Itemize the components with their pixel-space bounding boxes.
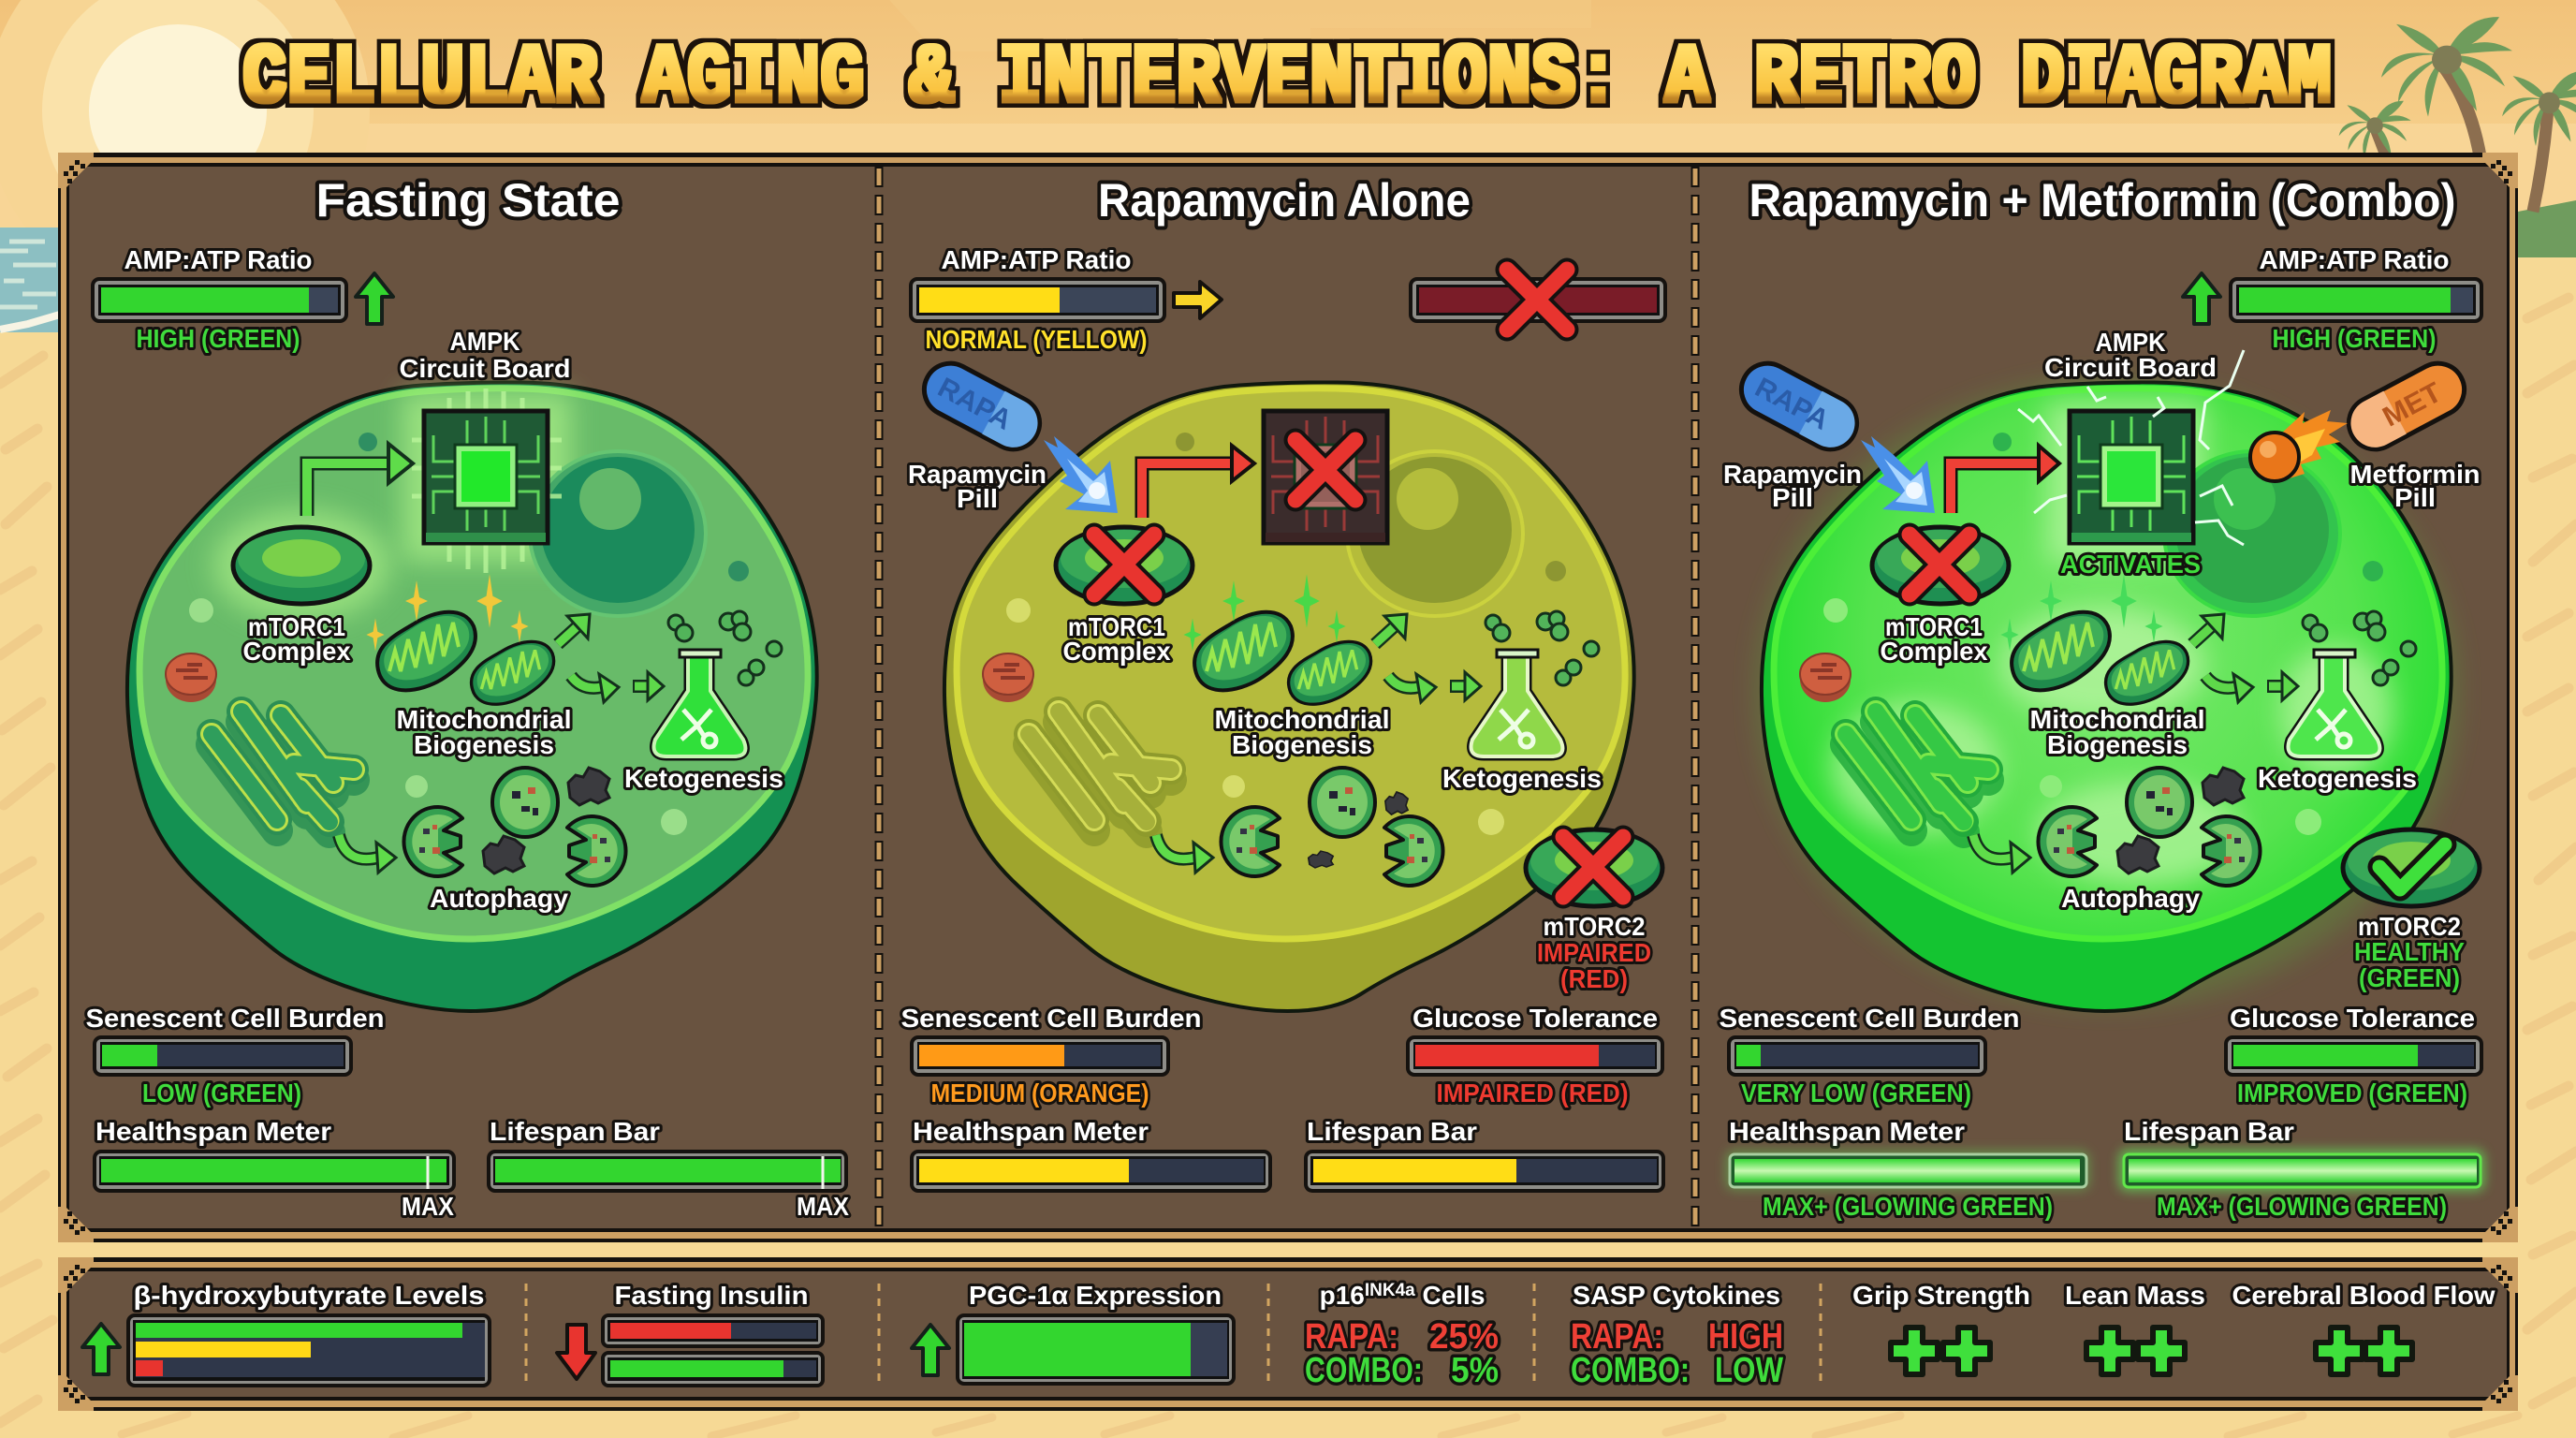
island on the right (2518, 200, 2576, 257)
cerebral blood flow (2232, 1281, 2496, 1374)
label: mTORC1 Complex: Complex (1880, 637, 1988, 666)
label: mTORC2 healthy: HEALTHY (2354, 937, 2465, 966)
AMP:ATP ratio meter: HIGH (GREEN) (137, 324, 300, 353)
blue impulse arrow (1861, 436, 1935, 513)
panel: Rapamycin Alone (900, 174, 1665, 1191)
label: Mitochondrial Biogenesis: Mitochondrial (397, 705, 571, 734)
heading: Rapamycin Alone: Rapamycin Alone (1098, 174, 1471, 227)
sparkles (366, 574, 529, 652)
lean mass: Lean Mass (2065, 1281, 2205, 1310)
senescent cell burden meter (900, 1004, 1202, 1108)
AMP:ATP ratio meter (2183, 245, 2481, 353)
label: Ketogenesis: Ketogenesis (624, 764, 783, 793)
SASP cytokines: RAPA: (1571, 1317, 1663, 1357)
glucose tolerance meter (1408, 1004, 1662, 1108)
lifespan bar, glowing: MAX+ (GLOWING GREEN) (2157, 1192, 2447, 1221)
label: Rapamycin Pill: Rapamycin (1723, 460, 1862, 489)
golgi (1846, 712, 1988, 832)
label: AMPK Circuit Board: Circuit Board (2044, 353, 2217, 382)
p16 INK4a cells: p16 (1320, 1281, 1365, 1310)
healthspan meter (912, 1117, 1270, 1191)
beta-hydroxybutyrate levels: β-hydroxybutyrate Levels (133, 1281, 485, 1310)
metformin pill: MET (2378, 376, 2447, 433)
mTORC2 impaired (1526, 829, 1662, 906)
label: mTORC2 impaired: mTORC2 (1543, 912, 1646, 941)
panel: Rapamycin + Metformin (Combo) (1719, 174, 2484, 1221)
fasting insulin (557, 1281, 823, 1386)
SASP cytokines: SASP Cytokines (1573, 1281, 1780, 1310)
label: AMPK Circuit Board: AMPK (449, 327, 520, 356)
label: Mitochondrial Biogenesis: Biogenesis (2047, 730, 2188, 759)
label: Ketogenesis: Ketogenesis (1442, 764, 1602, 793)
heading: Fasting State: Fasting State (316, 174, 620, 227)
sparkles (2000, 574, 2163, 652)
label: Rapamycin Pill (1723, 460, 1862, 512)
p16 INK4a cells: COMBO: (1305, 1351, 1423, 1390)
chip glow rays (412, 389, 562, 573)
p16 INK4a cells: INK4a (1365, 1281, 1415, 1300)
organelle dots (189, 433, 749, 835)
cell: fasting (127, 382, 817, 1011)
grip strength: Grip Strength (1852, 1281, 2030, 1310)
label: Mitochondrial Biogenesis (2029, 705, 2205, 759)
glucose tolerance meter: Glucose Tolerance (1412, 1004, 1658, 1033)
lifespan bar (489, 1117, 849, 1221)
sparkles (1183, 574, 1346, 652)
rapamycin pill (915, 354, 1048, 459)
heading: Rapamycin + Metformin (Combo): Rapamycin + Metformin (Combo) (1749, 174, 2456, 227)
metformin pill (2340, 354, 2473, 459)
label: Rapamycin Pill (908, 460, 1046, 513)
p16 INK4a cells (1305, 1281, 1499, 1390)
rapamycin pill (1733, 354, 1866, 459)
lifespan bar: Lifespan Bar (1307, 1117, 1477, 1146)
label: mTORC2 impaired (1537, 912, 1651, 993)
organelle dots (1823, 433, 2383, 835)
label: mTORC1 Complex: Complex (243, 637, 351, 666)
label: AMPK Circuit Board (399, 327, 571, 383)
AMPK circuit board (424, 411, 548, 543)
red inhibition arrow (1142, 446, 1254, 518)
senescent cell burden meter: VERY LOW (GREEN) (1741, 1078, 1971, 1108)
cell: combo (1756, 379, 2458, 1011)
ketone bubbles (668, 611, 782, 685)
autophagy cells (1973, 768, 2261, 886)
flask (1471, 650, 1562, 756)
arrow mTORC1 to AMPK (307, 444, 413, 516)
lightning around AMPK (2018, 350, 2244, 545)
label: mTORC2 healthy: mTORC2 (2358, 912, 2461, 941)
main panel frame (58, 153, 2518, 1242)
glucose tolerance meter: Glucose Tolerance (2230, 1004, 2475, 1033)
label: Autophagy: Autophagy (430, 884, 568, 913)
label: Mitochondrial Biogenesis (1215, 705, 1389, 759)
label: Metformin Pill: Pill (2394, 483, 2436, 512)
AMP:ATP ratio meter: AMP:ATP Ratio (124, 245, 313, 274)
healthspan meter: Healthspan Meter (95, 1117, 331, 1146)
panel: Fasting State (86, 174, 849, 1221)
label: Ketogenesis: Ketogenesis (2258, 764, 2417, 793)
lifespan bar, glowing (2119, 1117, 2484, 1221)
ketone bubbles (1486, 611, 1599, 685)
PGC-1 alpha expression: PGC-1α Expression (969, 1281, 1222, 1310)
healthspan meter (95, 1117, 454, 1221)
senescent cell burden meter: MEDIUM (ORANGE) (930, 1078, 1149, 1108)
AMP:ATP ratio meter (93, 245, 393, 353)
SASP cytokines: LOW (1715, 1351, 1783, 1390)
nucleus (2164, 451, 2340, 616)
label: mTORC1 Complex: Complex (1063, 637, 1171, 666)
AMP:ATP ratio meter: AMP:ATP Ratio (942, 245, 1131, 274)
blue impulse arrow (1044, 436, 1118, 513)
pathway arrows (2192, 614, 2298, 702)
organelle dots (1006, 433, 1566, 835)
senescent cell burden meter (86, 1004, 384, 1108)
label: Metformin Pill (2349, 460, 2481, 512)
PGC-1 alpha expression (912, 1281, 1234, 1384)
label: Mitochondrial Biogenesis: Mitochondrial (2029, 705, 2205, 734)
label: Metformin Pill: Metformin (2349, 460, 2481, 489)
label: mTORC2 impaired: IMPAIRED (1537, 938, 1651, 967)
title: CELLULAR AGING & INTERVENTIONS: A RETRO DIAGRAM (242, 32, 2332, 127)
healthspan meter, glowing: MAX+ (GLOWING GREEN) (1763, 1192, 2053, 1221)
lean mass (2065, 1281, 2205, 1374)
pathway arrows (1375, 614, 1481, 702)
healthspan meter, glowing: Healthspan Meter (1729, 1117, 1965, 1146)
lifespan bar (1306, 1117, 1663, 1191)
grip strength (1852, 1281, 2030, 1374)
senescent cell burden meter: LOW (GREEN) (142, 1078, 301, 1108)
cell: rapamycin (944, 382, 1634, 1011)
SASP cytokines (1571, 1281, 1783, 1390)
label: Rapamycin Pill: Pill (957, 484, 998, 513)
label: mTORC1 Complex (243, 612, 351, 666)
golgi (1029, 712, 1171, 832)
label: Rapamycin Pill: Rapamycin (908, 460, 1046, 489)
glucose tolerance meter: IMPROVED (GREEN) (2237, 1078, 2467, 1108)
label: mTORC1 Complex: mTORC1 (248, 612, 345, 641)
label: Autophagy: Autophagy (2061, 884, 2200, 913)
label: mTORC1 Complex (1063, 612, 1171, 666)
label: mTORC1 Complex: mTORC1 (1068, 612, 1165, 641)
p16 INK4a cells: RAPA: (1305, 1317, 1398, 1357)
senescent cell burden meter (1719, 1004, 2020, 1108)
label: mTORC2 healthy: (GREEN) (2359, 963, 2460, 992)
sand ripples (0, 298, 2576, 1438)
red inhibition arrow (1951, 446, 2059, 513)
autophagy cells (339, 768, 626, 886)
senescent cell burden meter: Senescent Cell Burden (1719, 1004, 2020, 1033)
cerebral blood flow: Cerebral Blood Flow (2232, 1281, 2496, 1310)
SASP cytokines: COMBO: (1571, 1351, 1690, 1390)
p16 INK4a cells: 25% (1429, 1317, 1499, 1357)
healthspan meter: Healthspan Meter (913, 1117, 1149, 1146)
metformin fireball (2250, 410, 2348, 481)
AMPK circuit board, inhibited (1264, 411, 1387, 543)
glucose tolerance meter: IMPAIRED (RED) (1436, 1078, 1629, 1108)
label: mTORC2 impaired: (RED) (1560, 964, 1628, 993)
label: Rapamycin Pill: Pill (1772, 483, 1813, 512)
label: AMPK Circuit Board: Circuit Board (399, 354, 571, 383)
label: mTORC2 healthy (2354, 912, 2465, 992)
red organelle (166, 653, 216, 702)
p16 INK4a cells: Cells (1415, 1281, 1485, 1310)
AMP:ATP ratio meter: HIGH (GREEN) (2273, 324, 2436, 353)
senescent cell burden meter: Senescent Cell Burden (86, 1004, 384, 1033)
beta-hydroxybutyrate levels (82, 1281, 490, 1386)
mitochondria (1194, 612, 1371, 704)
sea on the left (0, 227, 60, 332)
flask (653, 650, 745, 756)
mitochondria (377, 612, 554, 704)
label: Mitochondrial Biogenesis: Mitochondrial (1215, 705, 1389, 734)
pathway arrows (558, 614, 664, 702)
rapamycin pill: RAPA (1749, 372, 1834, 436)
label: Mitochondrial Biogenesis: Biogenesis (1232, 730, 1372, 759)
nucleus (530, 451, 706, 616)
label: mTORC1 Complex (1880, 612, 1988, 666)
healthspan meter: MAX (402, 1192, 454, 1221)
nucleus (1347, 451, 1523, 616)
blocked meter (1411, 270, 1665, 330)
label: AMPK Circuit Board (2044, 328, 2217, 382)
ketone bubbles (2303, 611, 2416, 685)
label: AMPK Circuit Board: AMPK (2095, 328, 2166, 357)
label: Mitochondrial Biogenesis: Biogenesis (414, 730, 554, 759)
AMP:ATP ratio meter: NORMAL (YELLOW) (925, 325, 1148, 354)
label: ACTIVATES: ACTIVATES (2060, 550, 2201, 579)
mTORC2 healthy (2343, 829, 2480, 906)
golgi (212, 712, 354, 832)
healthspan meter, glowing (1726, 1117, 2089, 1221)
label: mTORC1 Complex: mTORC1 (1885, 612, 1983, 641)
rapamycin pill: RAPA (932, 372, 1017, 436)
red organelle (1800, 653, 1851, 702)
palm trees (2339, 17, 2576, 212)
SASP cytokines: HIGH (1708, 1317, 1783, 1357)
fasting insulin: Fasting Insulin (614, 1281, 809, 1310)
AMP:ATP ratio meter: AMP:ATP Ratio (2260, 245, 2449, 274)
mTORC1 inhibited (1056, 527, 1193, 604)
lifespan bar: Lifespan Bar (490, 1117, 660, 1146)
senescent cell burden meter: Senescent Cell Burden (900, 1004, 1202, 1033)
mTORC1 complex (233, 527, 370, 604)
p16 INK4a cells: 5% (1451, 1351, 1499, 1390)
lifespan bar, glowing: Lifespan Bar (2124, 1117, 2294, 1146)
AMPK circuit board, activated (2070, 411, 2193, 543)
autophagy cells (1156, 768, 1443, 886)
flask (2288, 650, 2379, 756)
label: Mitochondrial Biogenesis (397, 705, 571, 759)
glucose tolerance meter (2226, 1004, 2481, 1108)
red organelle (983, 653, 1033, 702)
sun (0, 0, 370, 302)
panel: bottom biomarkers (58, 1257, 2518, 1411)
mitochondria (2012, 612, 2188, 704)
lifespan bar: MAX (797, 1192, 849, 1221)
AMP:ATP ratio meter (911, 245, 1222, 354)
mTORC1 inhibited (1872, 527, 2009, 604)
